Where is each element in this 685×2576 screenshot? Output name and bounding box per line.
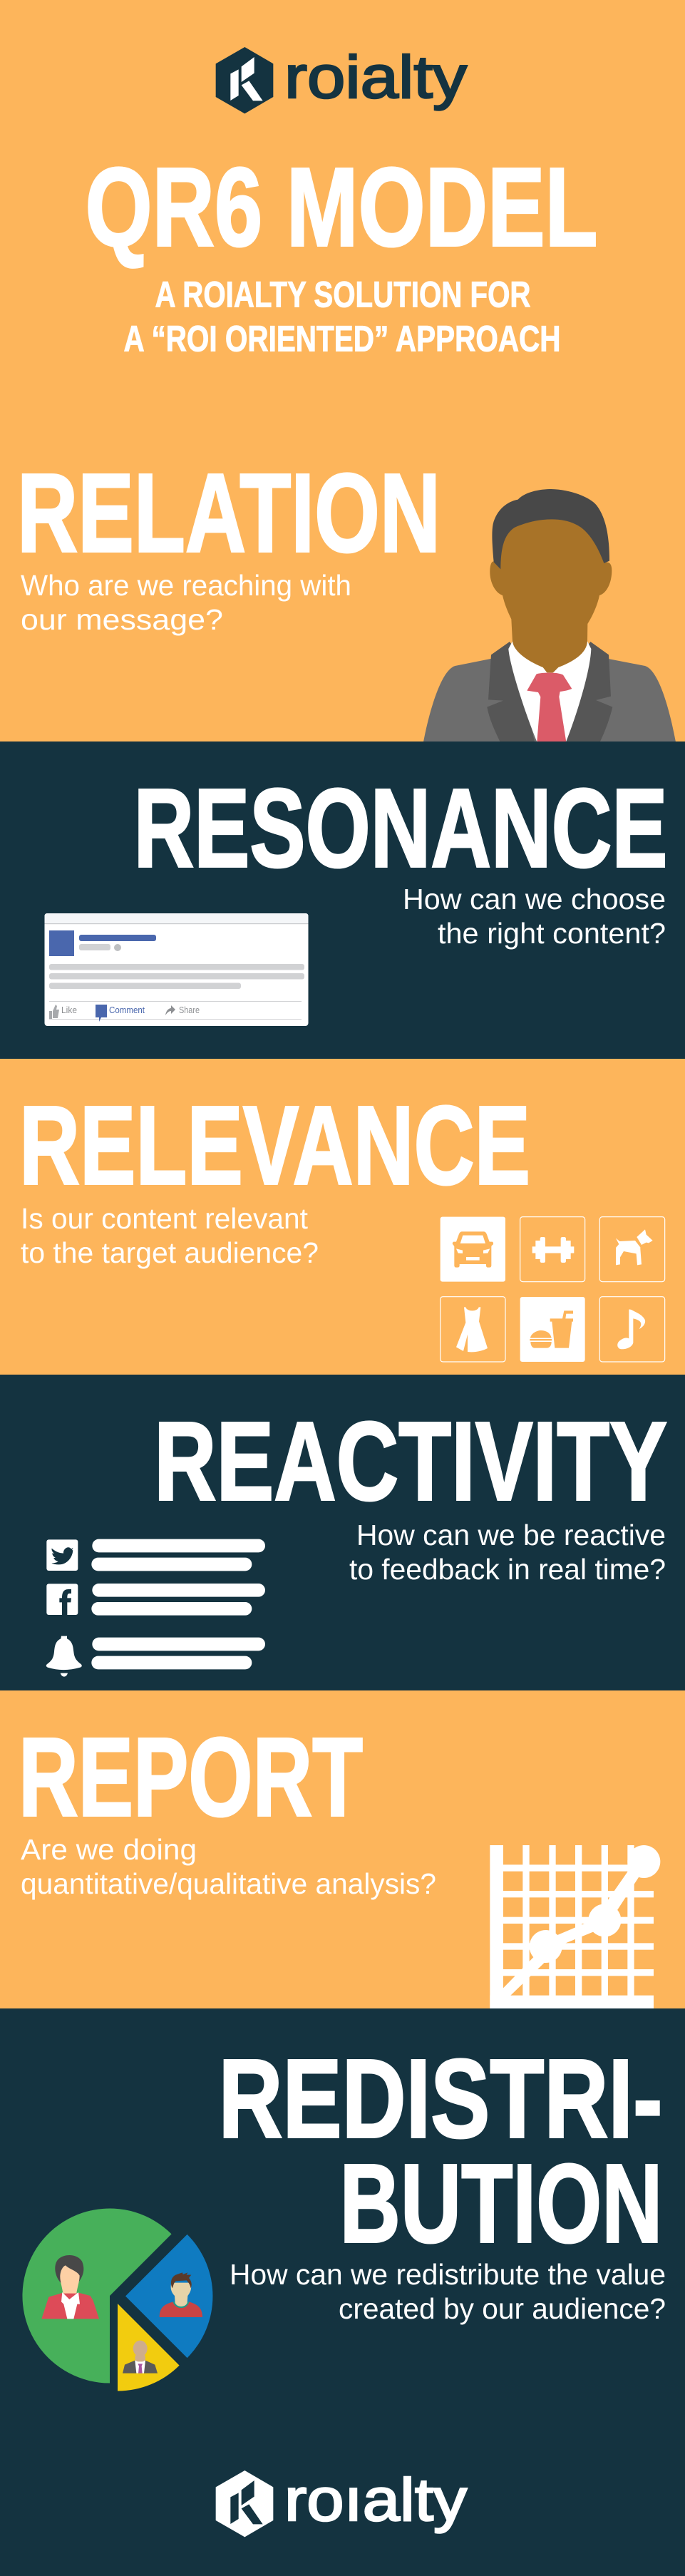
line chart icon [490,1845,660,2008]
pie slice: yellow [118,2304,180,2391]
social post card: Share [179,1005,200,1015]
text: report question [21,1833,436,1900]
text: resonance question: How can we choose [403,883,666,915]
social post card: Like [61,1005,77,1015]
panel: header [0,0,685,456]
panel: relevance [0,1059,685,1375]
subtitle line 2: A “ROI ORIENTED” APPROACH [124,318,560,359]
social post card: Comment [109,1005,145,1015]
pie chart: audience [22,2208,212,2391]
icon: bell [46,1636,82,1677]
logo: roialty bottom: roıalty [284,2466,467,2533]
icon: car [441,1217,505,1282]
text: reactivity question: How can we be reactive [356,1519,666,1551]
text: relevance question [21,1202,319,1269]
text: relevance question: to the target audience? [21,1236,319,1269]
feed bars: facebook [91,1584,265,1616]
icon: burger and drink [520,1297,585,1362]
panel: redistribution [0,2008,685,2576]
pie slice: green [22,2208,172,2383]
panel: report [0,1690,685,2008]
feed list [46,1539,265,1677]
icon: dog [599,1217,665,1282]
icon: dumbbell [520,1217,585,1282]
text: resonance question [403,883,666,950]
icon: older man [123,2341,158,2374]
icon grid: interests [441,1217,665,1362]
pie slice: blue [125,2234,212,2358]
text: relation question: Who are we reaching with [21,569,351,602]
text: resonance question: the right content? [438,917,666,950]
icon: twitter [46,1539,78,1571]
logo: roialty top [216,43,467,113]
icon: young man [160,2272,202,2317]
text: relation question [21,569,351,636]
social post card [44,913,308,1026]
heading: relation: RELATION [17,451,441,576]
text: relation question: our message? [21,603,223,636]
heading: relevance: RELEVANCE [19,1084,530,1208]
text: report question: quantitative/qualitative analysis? [21,1867,436,1900]
icon: businessman [423,489,676,742]
text: redistribution question: How can we redistribute the value [230,2258,666,2291]
feed bars: twitter [91,1539,265,1571]
subtitle line 1: A ROIALTY SOLUTION FOR [155,274,530,315]
text: report question: Are we doing [21,1833,197,1866]
icon: music note [599,1297,665,1362]
text: redistribution question: created by our audience? [339,2292,666,2325]
text: redistribution question [230,2258,666,2325]
icon: facebook [46,1584,78,1615]
feed bars: notifications [91,1638,265,1669]
logo: roialty top: roialty [284,43,467,111]
text: reactivity question: to feedback in real time? [349,1553,666,1586]
icon: dress [441,1297,505,1362]
heading: report: REPORT [19,1715,363,1839]
panel: relation [0,451,685,742]
panel: reactivity [0,1375,685,1690]
text: reactivity question [349,1519,666,1586]
panel: resonance [0,742,685,1059]
text: relevance question: Is our content relevant [21,1202,309,1235]
icon: woman [41,2255,99,2319]
logo: roialty bottom [216,2466,467,2537]
